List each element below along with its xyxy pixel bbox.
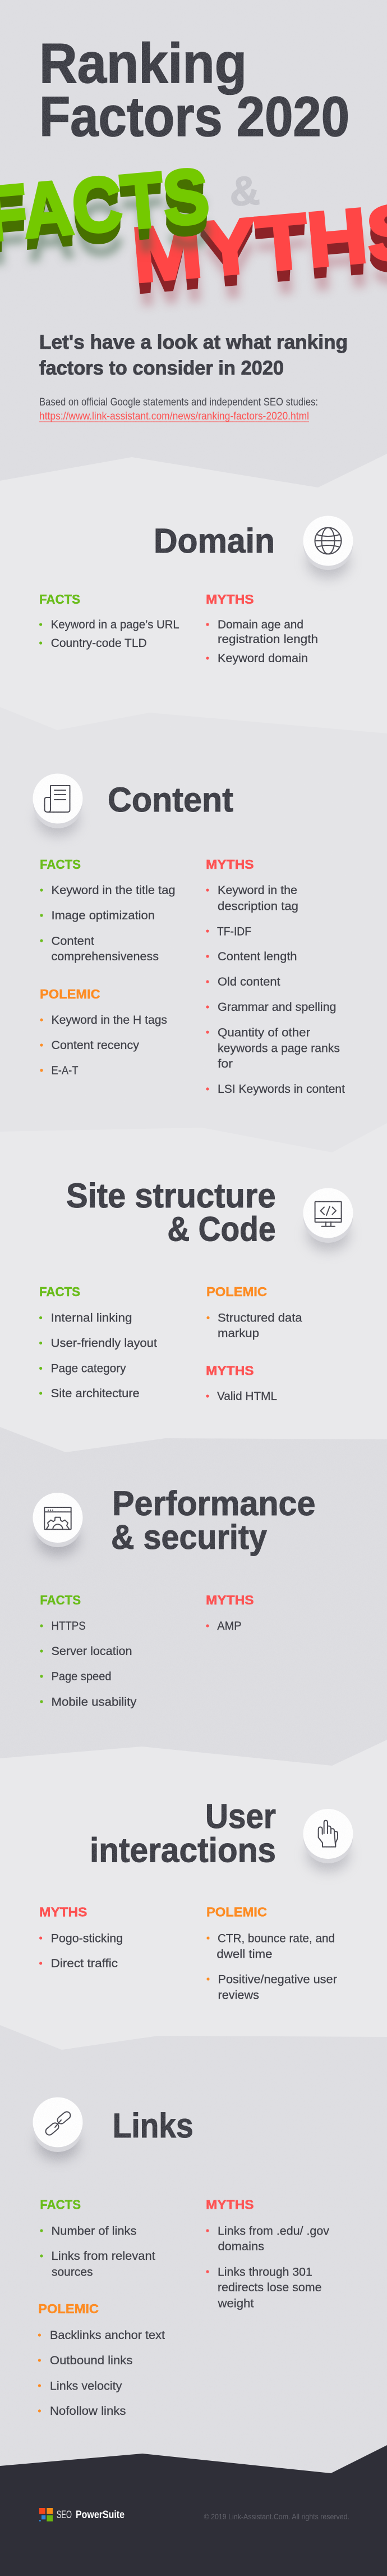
myths list: Direct traffic [51,1957,118,1970]
facts list: Content [52,934,94,948]
facts list: sources [52,2265,93,2278]
myths list: Keyword in the [218,883,297,897]
myths list: keywords a page ranks [218,1042,340,1055]
heading: user interactions: User [205,1797,276,1835]
heading: domain: Domain [154,522,275,560]
heading: site structure and code: & Code [167,1210,276,1248]
facts list: Internal linking [51,1311,132,1325]
polemic list: Content recency [52,1038,139,1052]
source note [39,396,318,422]
myths list: MYTHS [206,1593,254,1607]
facts list: FACTS [39,1284,80,1299]
facts list: Keyword in the title tag [52,883,175,897]
myths list: Old content [218,975,280,988]
polemic list: CTR, bounce rate, and [218,1932,335,1945]
myths list: MYTHS [39,1905,87,1920]
myths list: MYTHS [206,857,254,872]
myths list: Grammar and spelling [218,1000,337,1014]
facts list: FACTS [40,1593,81,1607]
facts list [40,1593,137,1708]
facts list: Site architecture [51,1387,140,1400]
heading: performance and security: Performance [112,1484,315,1522]
icon: newspaper [33,774,83,836]
facts list: FACTS [39,592,80,607]
icon: chain link [33,2097,83,2160]
polemic list: Positive/negative user [218,1973,337,1986]
myths list [206,2197,329,2310]
polemic list [206,1284,302,1340]
facts list [40,857,175,963]
icon: pointing hand [303,1809,353,1872]
panel: performance and security [0,1427,387,1769]
subtitle [39,331,348,379]
myths list: LSI Keywords in content [218,1082,345,1096]
polemic list: Nofollow links [50,2404,126,2418]
myths list: for [218,1057,233,1070]
panel: site structure and code [0,1123,387,1455]
subtitle: factors to consider in 2020 [39,357,284,379]
facts list [40,2197,155,2278]
myths list: redirects lose some [218,2281,322,2294]
subtitle: Let's have a look at what ranking [39,331,348,353]
myths list: MYTHS [206,592,254,607]
panel: header [0,0,387,505]
polemic list: Backlinks anchor text [50,2328,165,2342]
myths list: Pogo-sticking [51,1932,123,1945]
polemic list [206,1905,337,2002]
myths list [206,857,345,1096]
polemic list: E-A-T [52,1064,79,1077]
ampersand: & [228,168,261,215]
polemic list: Outbound links [50,2354,132,2367]
facts list: comprehensiveness [52,950,159,963]
myths list: Quantity of other [218,1025,310,1039]
facts list: FACTS [40,857,81,872]
heading: site structure and code [66,1177,276,1248]
myths list [206,1593,254,1633]
icon: browser gear [33,1493,83,1556]
facts list: User-friendly layout [51,1336,157,1349]
myths list: Content length [218,950,297,963]
panel: user interactions [0,1740,387,2053]
myths list: Keyword domain [218,651,308,665]
myths list: Valid HTML [217,1389,277,1403]
copyright: © 2019 Link-Assistant.Com. All rights reserved. [204,2513,349,2521]
myths list: Links from .edu/ .gov [218,2224,329,2237]
facts list: Number of links [52,2224,136,2237]
title: Ranking [39,32,247,95]
panel: links [0,2025,387,2477]
polemic list: markup [218,1326,259,1340]
logo: SEO PowerSuite: PowerSuite [76,2509,125,2521]
source note: Based on official Google statements and independent SEO studies: [39,396,318,408]
heading: site structure and code: Site structure [66,1177,276,1215]
facts list: HTTPS [52,1619,86,1633]
heading: user interactions: interactions [90,1831,276,1870]
source note: https://www.link-assistant.com/news/ranking-factors-2020.html [39,410,309,422]
polemic list [40,987,167,1077]
myths list: TF-IDF [217,925,251,938]
heading: links: Links [113,2107,194,2145]
panel: content [0,707,387,1157]
polemic list [38,2301,165,2418]
myths list: AMP [217,1619,241,1633]
facts list: Links from relevant [52,2249,155,2263]
polemic list: reviews [218,1989,259,2002]
myths list: weight [217,2296,254,2310]
myths list: MYTHS [206,1364,254,1378]
logo: SEO PowerSuite [39,2508,125,2522]
heading: performance and security: & security [111,1518,267,1556]
myths list: MYTHS [206,2197,254,2212]
footer [0,2445,387,2576]
facts list: Keyword in a page’s URL [51,618,179,631]
polemic list: POLEMIC [38,2301,99,2316]
logo: SEO PowerSuite: SEO [57,2509,72,2521]
title [39,32,349,148]
heading: user interactions [90,1797,276,1870]
panel: domain [0,454,387,736]
icon: code monitor [303,1188,353,1251]
myths list: registration length [218,632,318,646]
myths list: Links through 301 [218,2265,312,2278]
facts list: Server location [52,1644,132,1658]
myths list: Domain age and [218,618,303,631]
facts list: Page speed [52,1670,111,1683]
icon: globe [303,516,353,578]
myths list: description tag [218,900,298,913]
facts list [39,592,179,650]
heading: content: Content [108,781,233,819]
facts list: Image optimization [52,909,155,922]
myths list: domains [218,2240,264,2253]
facts list [39,1284,157,1400]
polemic list: Structured data [218,1311,302,1325]
polemic list: POLEMIC [206,1284,267,1299]
facts list: Page category [51,1362,126,1375]
polemic list: Keyword in the H tags [52,1013,167,1027]
polemic list: Links velocity [50,2379,122,2392]
facts list: FACTS [40,2197,81,2212]
polemic list: POLEMIC [40,987,100,1001]
heading: performance and security [111,1484,315,1556]
facts list: Country-code TLD [51,636,147,650]
myths list [206,592,318,665]
facts list: Mobile usability [52,1695,137,1708]
myths list [39,1905,123,1970]
polemic list: POLEMIC [206,1905,267,1920]
title: Factors 2020 [39,85,349,148]
myths list [206,1364,277,1403]
polemic list: dwell time [216,1948,273,1961]
